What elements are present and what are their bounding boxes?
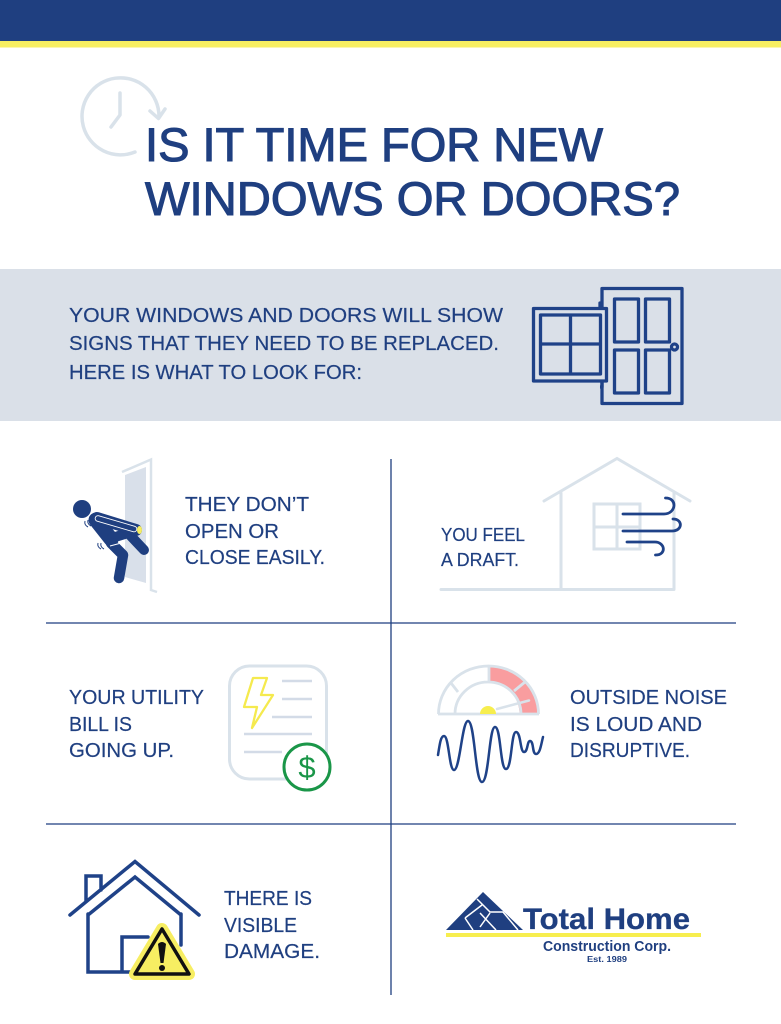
- text: noise: IS LOUD AND: [570, 714, 702, 736]
- text: noise: OUTSIDE NOISE: [570, 687, 727, 709]
- icon: door and window: [534, 288, 682, 404]
- text: draft: YOU FEEL: [441, 525, 525, 545]
- panel: hard to open: [73, 460, 325, 592]
- icon: bill with lightning and dollar: $: [298, 750, 316, 785]
- panel: utility bill: [69, 666, 330, 790]
- text: doors stick: [185, 494, 325, 569]
- title: WINDOWS OR DOORS?: [145, 172, 680, 225]
- text: damage: THERE IS: [224, 888, 312, 910]
- top banner: [0, 0, 781, 48]
- text: draft: A DRAFT.: [441, 550, 519, 570]
- intro text: SIGNS THAT THEY NEED TO BE REPLACED.: [69, 332, 499, 355]
- text: doors stick: OPEN OR: [185, 521, 279, 543]
- panel: intro band: [0, 269, 781, 421]
- icon: house with warning sign: [70, 862, 199, 974]
- text: damage: DAMAGE.: [224, 941, 320, 963]
- title: [145, 118, 680, 225]
- text: damage: VISIBLE: [224, 915, 297, 937]
- logo established date: Est. 1989: [587, 954, 627, 964]
- intro text: HERE IS WHAT TO LOOK FOR:: [69, 361, 362, 384]
- icon: bill with lightning and dollar: [230, 666, 330, 790]
- logo wordmark: Total Home: [523, 903, 690, 936]
- text: doors stick: THEY DON’T: [185, 494, 309, 516]
- text: noise: [570, 687, 727, 762]
- logo: Total Home Construction Corp.: [446, 892, 701, 964]
- panel: damage: [70, 862, 320, 974]
- text: utility bill: BILL IS: [69, 714, 132, 736]
- text: doors stick: CLOSE EASILY.: [185, 547, 325, 569]
- intro text: [69, 304, 504, 384]
- panel: draft: [441, 458, 690, 590]
- icon: clock: [82, 78, 165, 155]
- text: draft: [441, 525, 525, 570]
- logo subtitle: Construction Corp.: [543, 939, 671, 955]
- text: utility bill: GOING UP.: [69, 740, 174, 762]
- text: noise: DISRUPTIVE.: [570, 740, 690, 762]
- logo mark: roof: [446, 892, 523, 930]
- grid dividers: [46, 459, 736, 995]
- panel: noise: [438, 666, 727, 782]
- icon: decibel gauge and sound wave: [438, 666, 543, 782]
- intro text: YOUR WINDOWS AND DOORS WILL SHOW: [69, 304, 504, 327]
- text: damage: [224, 888, 320, 963]
- text: utility bill: [69, 687, 204, 762]
- title: IS IT TIME FOR NEW: [145, 118, 604, 171]
- text: utility bill: YOUR UTILITY: [69, 687, 204, 709]
- icon: drafty house: [441, 458, 690, 590]
- icon: person pushing door: [73, 460, 157, 592]
- logo yellow rule: [446, 933, 701, 937]
